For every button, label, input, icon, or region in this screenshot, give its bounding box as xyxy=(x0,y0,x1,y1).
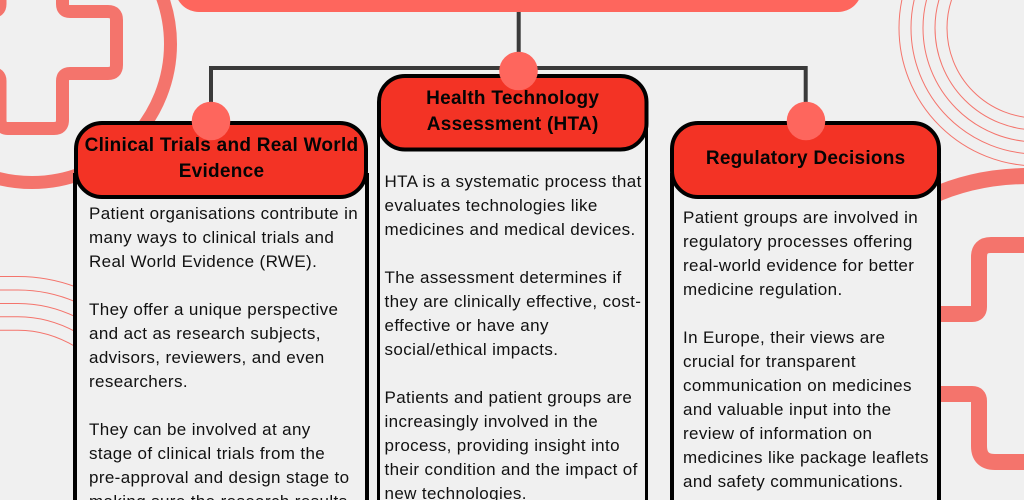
panel header xyxy=(379,76,646,150)
body text: In Europe, their views are xyxy=(683,328,885,347)
body text: They can be involved at any xyxy=(89,420,311,439)
connector node xyxy=(787,102,825,140)
body text: medicine regulation. xyxy=(683,280,843,299)
body text: Real World Evidence (RWE). xyxy=(89,252,317,271)
panel: regulatory decisions xyxy=(672,102,939,500)
panel: clinical trials and real world evidence xyxy=(75,102,367,500)
title bar xyxy=(175,0,862,12)
panel header xyxy=(672,123,939,197)
body text: regulatory processes offering xyxy=(683,232,913,251)
heading: Clinical Trials and Real World xyxy=(85,135,358,156)
connector node xyxy=(192,102,230,140)
heading: Health Technology xyxy=(426,88,599,109)
body text: The assessment determines if xyxy=(384,268,622,287)
body text: crucial for transparent xyxy=(683,352,856,371)
body text: evaluates technologies like xyxy=(384,196,598,215)
body text: medicines like package leaflets xyxy=(683,448,929,467)
heading: Regulatory Decisions xyxy=(706,148,906,169)
body text: Patient groups are involved in xyxy=(683,208,918,227)
body text: review of information on xyxy=(683,424,872,443)
panel body xyxy=(75,175,367,500)
body text: their condition and the impact of xyxy=(384,460,638,479)
decoration: thin curved lines, left xyxy=(0,276,76,347)
body text: researchers. xyxy=(89,372,188,391)
body text: effective or have any xyxy=(384,316,549,335)
icon: medical cross in circle, top left xyxy=(0,0,170,182)
body text: They offer a unique perspective xyxy=(89,300,338,319)
panel body xyxy=(672,175,939,500)
body text: increasingly involved in the xyxy=(384,412,598,431)
body text: advisors, reviewers, and even xyxy=(89,348,325,367)
panel: health technology assessment xyxy=(378,52,646,500)
body text: pre-approval and design stage to xyxy=(89,468,349,487)
connector lines xyxy=(211,12,806,122)
body text: process, providing insight into xyxy=(384,436,620,455)
body text: they are clinically effective, cost- xyxy=(384,292,641,311)
body text: stage of clinical trials from the xyxy=(89,444,325,463)
panel header xyxy=(76,123,366,197)
body text: and valuable input into the xyxy=(683,400,891,419)
body text: Patient organisations contribute in xyxy=(89,204,358,223)
body text: many ways to clinical trials and xyxy=(89,228,334,247)
heading: Assessment (HTA) xyxy=(427,114,599,135)
body text: and act as research subjects, xyxy=(89,324,321,343)
connector node xyxy=(499,52,538,90)
panel body xyxy=(378,125,646,500)
decoration: thin concentric circles, top right xyxy=(899,0,1024,166)
body text: communication on medicines xyxy=(683,376,912,395)
body text: HTA is a systematic process that xyxy=(384,172,642,191)
heading: Evidence xyxy=(179,161,264,182)
body text: and safety communications. xyxy=(683,472,903,491)
icon: medical cross outline, right xyxy=(930,176,1024,462)
body text: Patients and patient groups are xyxy=(384,388,632,407)
body text: medicines and medical devices. xyxy=(384,220,636,239)
body text: real-world evidence for better xyxy=(683,256,914,275)
body text: social/ethical impacts. xyxy=(384,340,558,359)
